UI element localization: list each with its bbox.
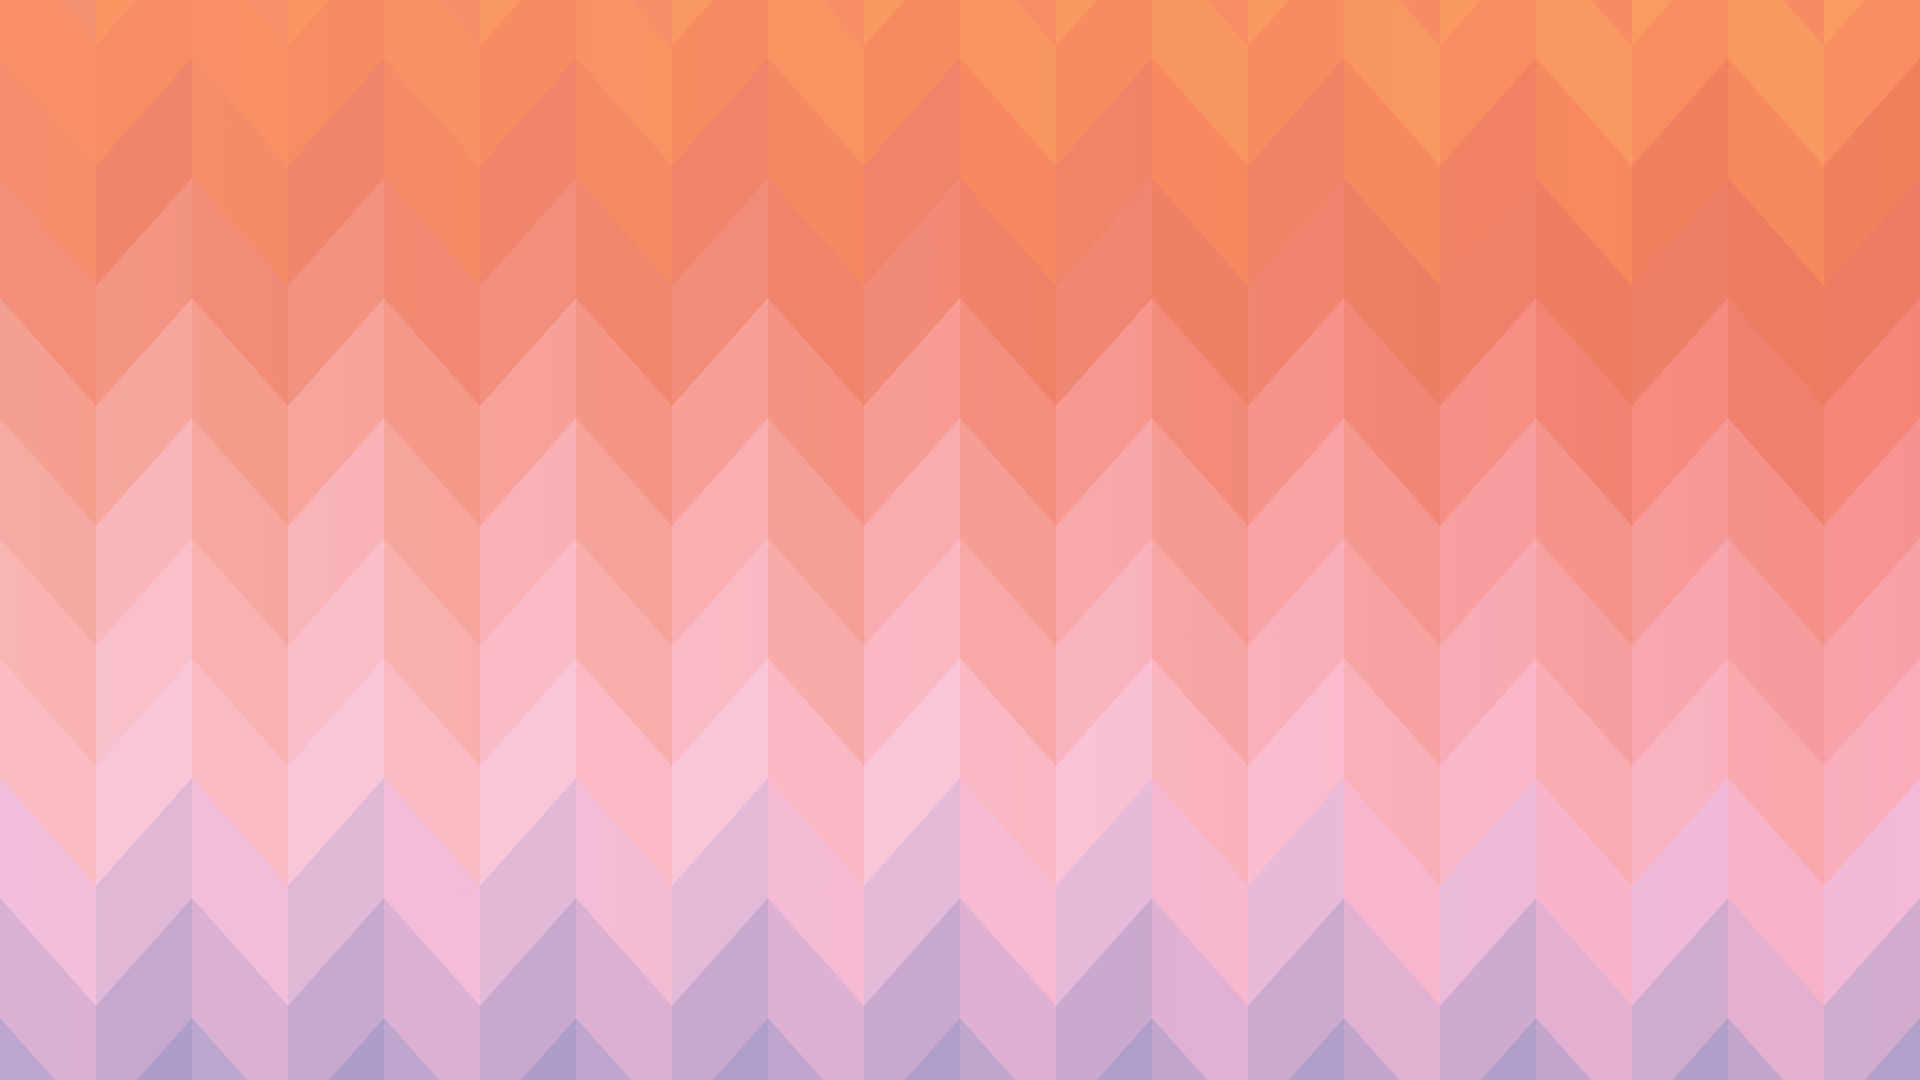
chevron band 1 <box>55 0 1865 46</box>
chevron band 7 <box>0 538 1920 766</box>
chevron band 6 <box>0 418 1920 646</box>
chevron band 11 <box>0 1018 1920 1080</box>
chevron band 4 <box>0 178 1920 406</box>
chevron band 5 <box>0 298 1920 526</box>
chevron band 10 <box>0 898 1920 1080</box>
chevron band 8 <box>0 658 1920 886</box>
chevron band 9 <box>0 778 1920 1006</box>
chevron band 3 <box>0 58 1920 286</box>
chevron band 2 <box>0 0 1920 166</box>
